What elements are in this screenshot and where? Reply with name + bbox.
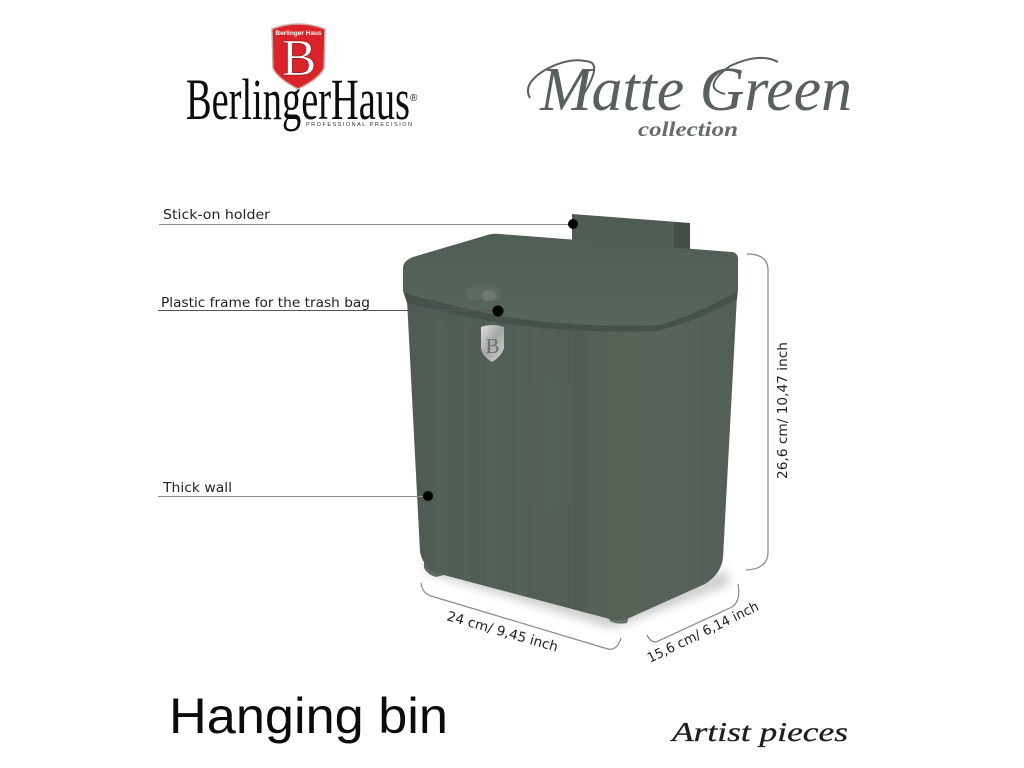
callout: plastic frame <box>158 295 504 316</box>
plastic frame rim <box>403 290 738 332</box>
logo wordmark: BerlingerHaus <box>186 67 410 132</box>
body ribs <box>465 580 583 612</box>
callout: thick wall <box>158 480 433 501</box>
product name: Hanging bin <box>169 688 448 744</box>
decorative swash on heading <box>528 58 778 100</box>
icon: red shield: B <box>282 30 316 87</box>
logo: Berlinger Haus <box>186 24 418 132</box>
callout: plastic frame: Plastic frame for the trash bag <box>161 295 370 311</box>
script heading: Matte Green <box>539 56 852 124</box>
product: hanging bin <box>403 214 738 628</box>
icon: red shield <box>272 24 325 89</box>
callout: thick wall: Thick wall <box>162 480 232 496</box>
bin badge <box>481 325 504 362</box>
lid latch <box>466 287 500 301</box>
dimension: width <box>421 583 621 656</box>
bin lid <box>403 234 738 326</box>
registered mark: ® <box>410 93 418 104</box>
dimension: width: 24 cm/ 9,45 inch <box>445 608 560 656</box>
callout: stick-on holder: Stick-on holder <box>163 207 270 223</box>
dimension: height: 26,6 cm/ 10,47 inch <box>775 342 791 479</box>
logo tagline: PROFESSIONAL PRECISION <box>306 122 412 128</box>
callout: stick-on holder <box>159 207 578 229</box>
dimension: depth: 15,6 cm/ 6,14 inch <box>645 599 761 667</box>
icon: red shield: Berlinger Haus <box>275 30 322 37</box>
stick-on holder <box>572 214 690 250</box>
script tagline: Artist pieces <box>669 717 848 747</box>
floor shadow <box>425 558 728 628</box>
dimension: height <box>746 254 791 570</box>
bin badge: B <box>485 334 500 358</box>
bin feet <box>424 560 630 624</box>
collection subtitle: collection <box>638 117 738 141</box>
bin body <box>407 296 737 620</box>
collection title <box>528 56 852 141</box>
